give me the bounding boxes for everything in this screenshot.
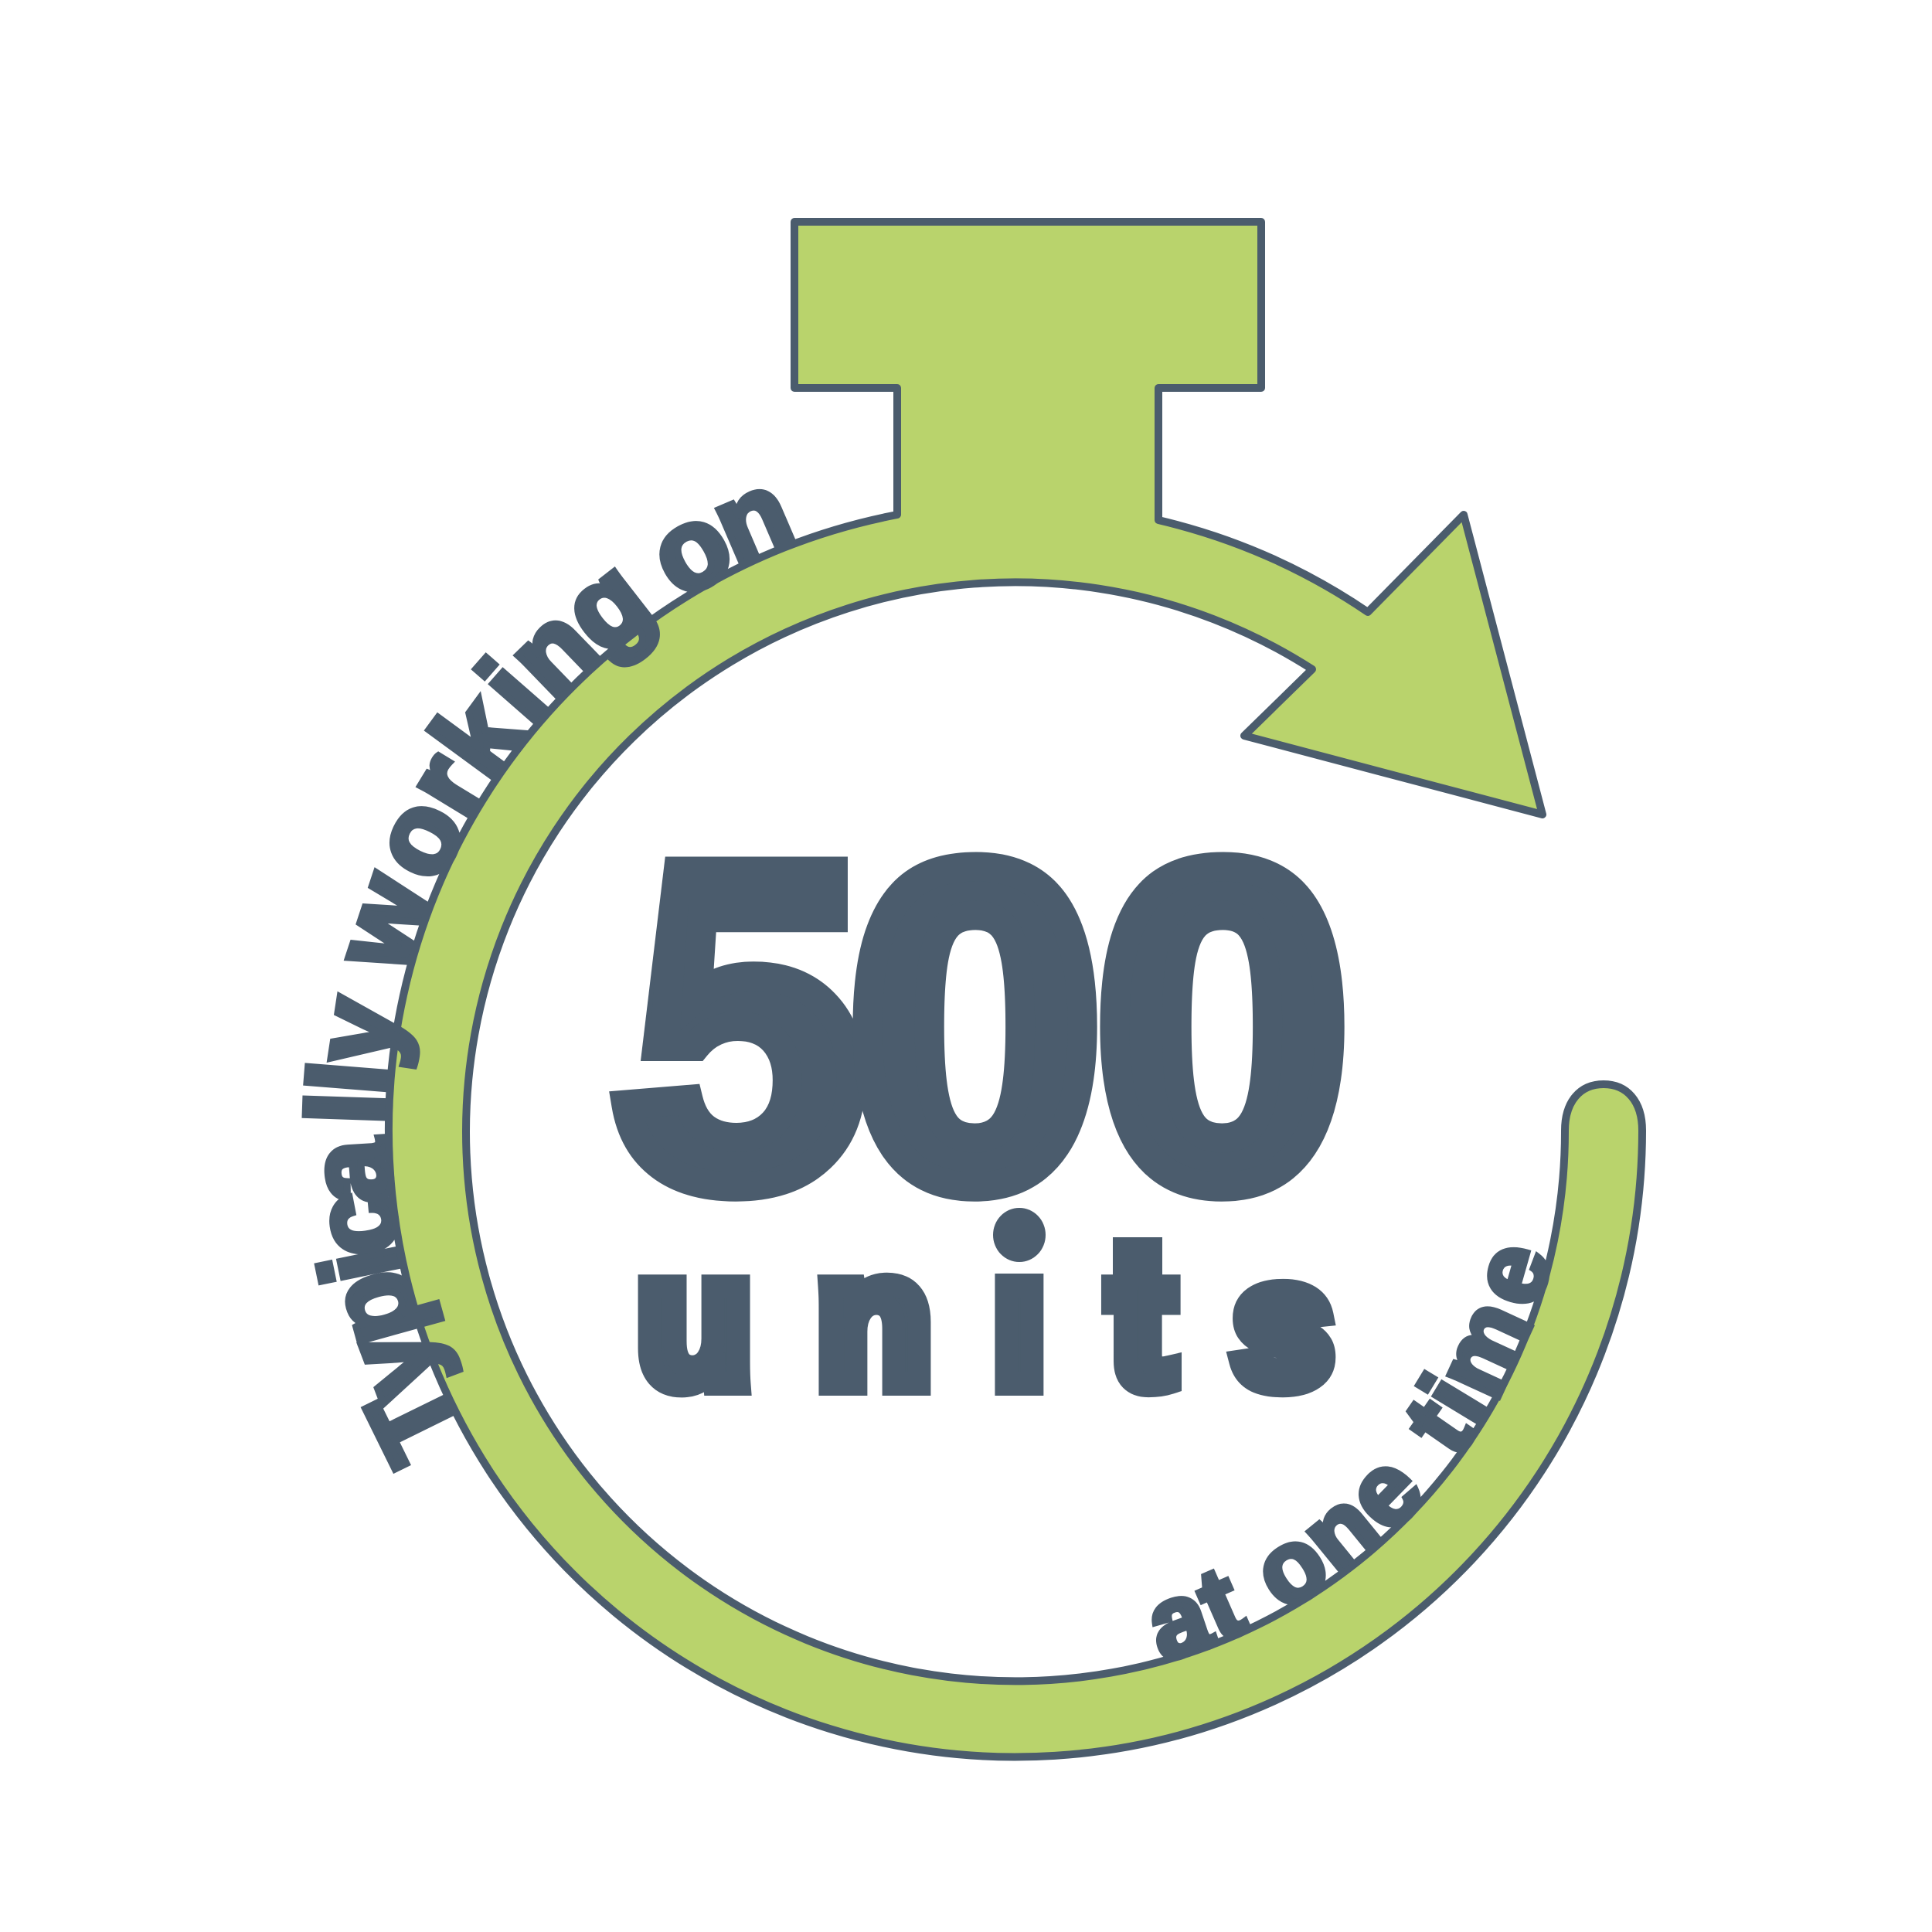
big number: 500: 500 bbox=[612, 773, 1349, 1278]
label: units: unit s bbox=[638, 1216, 1332, 1423]
curved text: typically working on: Typically working on bbox=[301, 488, 796, 1475]
curved text: at one time: at one time bbox=[1151, 1247, 1549, 1661]
icon: green stopwatch ring with circular arrow bbox=[389, 222, 1642, 1757]
